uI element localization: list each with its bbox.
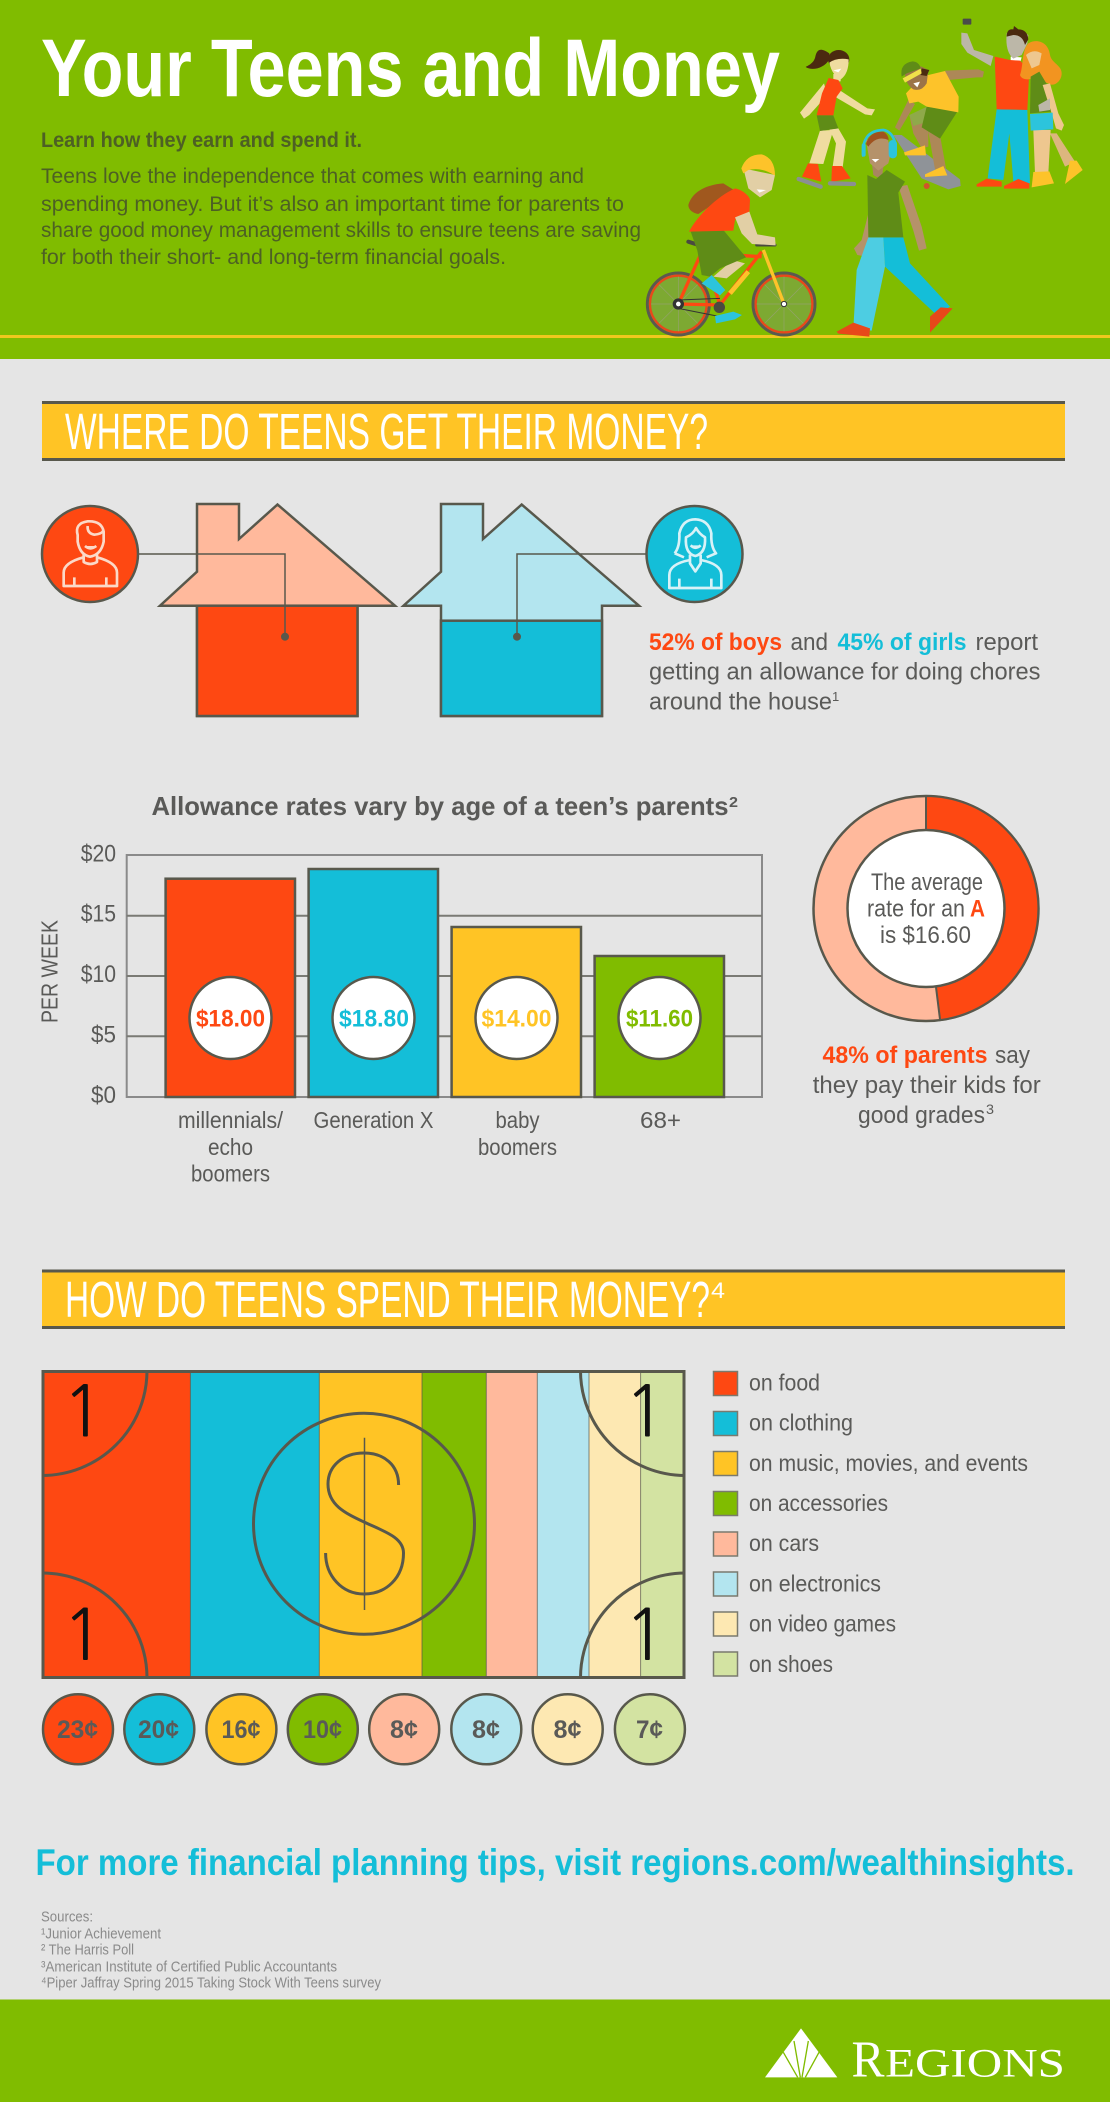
legend: spending categories: on electronics [749,1570,881,1596]
y axis labels: $20 [81,840,116,868]
icon: girl [646,506,742,602]
legend: spending categories: on cars [749,1530,819,1556]
text: allowance statistic: 52% of boys [649,629,782,656]
section heading: how do teens spend their money: HOW DO TEENS SPEND THEIR MONEY? [65,1271,710,1328]
house chart: girls [404,504,646,716]
legend: spending categories: on accessories [749,1490,888,1516]
legend: spending categories: on shoes [749,1651,833,1677]
y axis labels [81,840,116,1109]
coins: cents per dollar: 10¢ [303,1716,342,1744]
x axis labels: Generation X [314,1107,434,1133]
text: allowance statistic: 1 [832,689,839,704]
x axis labels: baby [496,1107,540,1133]
text: parents statistic: good grades [858,1102,985,1129]
chart heading: 2 [729,794,738,811]
sources: ⁴Piper Jaffray Spring 2015 Taking Stock With Teens survey [41,1975,381,1992]
bill numerals: 1 [624,1378,666,1448]
bar: 68+: $11.60 [626,1006,693,1033]
chart: dollar bill spending breakdown [42,1370,685,1678]
house chart: boys [139,504,395,716]
panel: hero banner [0,0,1110,359]
y axis title: PER WEEK [36,919,62,1023]
x axis labels: millennials/ [178,1107,284,1133]
figure: couple taking a selfie [961,19,1083,189]
donut centre text: The average [871,869,983,896]
legend: spending categories: on food [749,1370,820,1396]
y axis labels: $5 [91,1022,116,1048]
legend: spending categories [714,1370,1028,1677]
icon: dollar sign [326,1438,404,1610]
section heading: how do teens spend their money: 4 [711,1278,725,1303]
y axis labels: $10 [81,961,116,988]
bar: baby boomers [452,927,581,1097]
sources: ¹Junior Achievement [41,1926,162,1943]
text: allowance statistic: and [790,629,828,656]
x axis labels: 68+ [640,1107,681,1133]
coins: cents per dollar: 20¢ [138,1716,179,1744]
logo: regions wordmark [852,2032,1065,2089]
donut centre text: is $16.60 [880,922,971,949]
intro text block: spending money. But it’s also an important time for parents to [41,192,624,216]
legend: spending categories: on video games [749,1611,896,1637]
coins: cents per dollar: 8¢ [554,1716,582,1744]
sources: ² The Harris Poll [41,1942,134,1959]
intro text block: Teens love the independence that comes with earning and [41,164,584,188]
icon: boy [42,506,138,602]
coins: cents per dollar: 7¢ [636,1716,663,1744]
bill numerals: 1 [624,1601,666,1671]
figure: roller skating girl [799,50,875,187]
logo: regions triangle [765,2028,837,2077]
text: parents statistic: say [995,1042,1030,1069]
x axis labels: boomers [191,1160,270,1186]
legend: spending categories: on clothing [749,1410,853,1436]
intro text block: share good money management skills to ensure teens are saving [41,218,641,242]
footer band [0,2000,1110,2102]
donut centre text: rate for an [867,896,965,923]
sources: Sources: [41,1909,93,1926]
text: allowance statistic: report [976,629,1038,656]
coins: cents per dollar: 8¢ [390,1716,418,1744]
figure: cyclist on bicycle [647,154,815,335]
bar: baby boomers: $14.00 [482,1006,552,1033]
bar: generation x: $18.80 [339,1006,409,1033]
text: parents statistic: 48% of parents [822,1042,988,1069]
text: parents statistic: they pay their kids for [813,1072,1041,1099]
section heading: where do teens get their money: WHERE DO TEENS GET THEIR MONEY? [65,403,708,460]
intro text block [41,164,641,269]
bill numerals: 1 [62,1378,104,1448]
y axis labels: $15 [81,901,116,928]
text: parents statistic: 3 [986,1101,994,1117]
title: Your Teens and Money [41,23,780,114]
text: allowance statistic: around the house [649,688,832,716]
illustration: teens group [647,19,1083,337]
logo: regions wordmark: R [852,2032,885,2089]
x axis labels [178,1107,681,1186]
donut centre text [867,869,985,949]
text: allowance statistic [649,629,1040,716]
text: allowance statistic: getting an allowance for doing chores [649,658,1040,686]
intro text block: for both their short- and long-term financial goals. [41,245,506,269]
coins: cents per dollar [43,1694,685,1764]
bar: millennials: $18.00 [196,1006,265,1033]
bar: millennials [166,879,295,1097]
chart heading: Allowance rates vary by age of a teen’s parents [152,791,728,821]
donut centre text: A [970,896,985,923]
figure: walking boy with headphones [837,130,953,337]
coins: cents per dollar: 16¢ [222,1716,261,1744]
bar: generation x [309,869,438,1097]
legend: spending categories: on music, movies, and events [749,1450,1028,1476]
coins: cents per dollar: 23¢ [57,1716,98,1744]
logo: regions wordmark: EGIONS [885,2041,1065,2086]
subtitle: Learn how they earn and spend it. [41,129,362,152]
text: allowance statistic: 45% of girls [838,629,966,656]
bar chart: allowance rates [36,840,762,1186]
figure: skateboarder [893,61,984,189]
text: parents statistic [813,1042,1041,1129]
sources [41,1909,381,1992]
bill numerals: 1 [62,1601,104,1671]
donut chart: parents paying for grades [814,796,1038,1021]
x axis labels: boomers [478,1134,557,1160]
y axis labels: $0 [91,1082,116,1109]
bill numerals [62,1378,666,1671]
coins: cents per dollar: 8¢ [472,1716,500,1744]
bar: 68+ [595,956,724,1097]
sources: ³American Institute of Certified Public Accountants [41,1958,337,1975]
x axis labels: echo [208,1134,253,1160]
